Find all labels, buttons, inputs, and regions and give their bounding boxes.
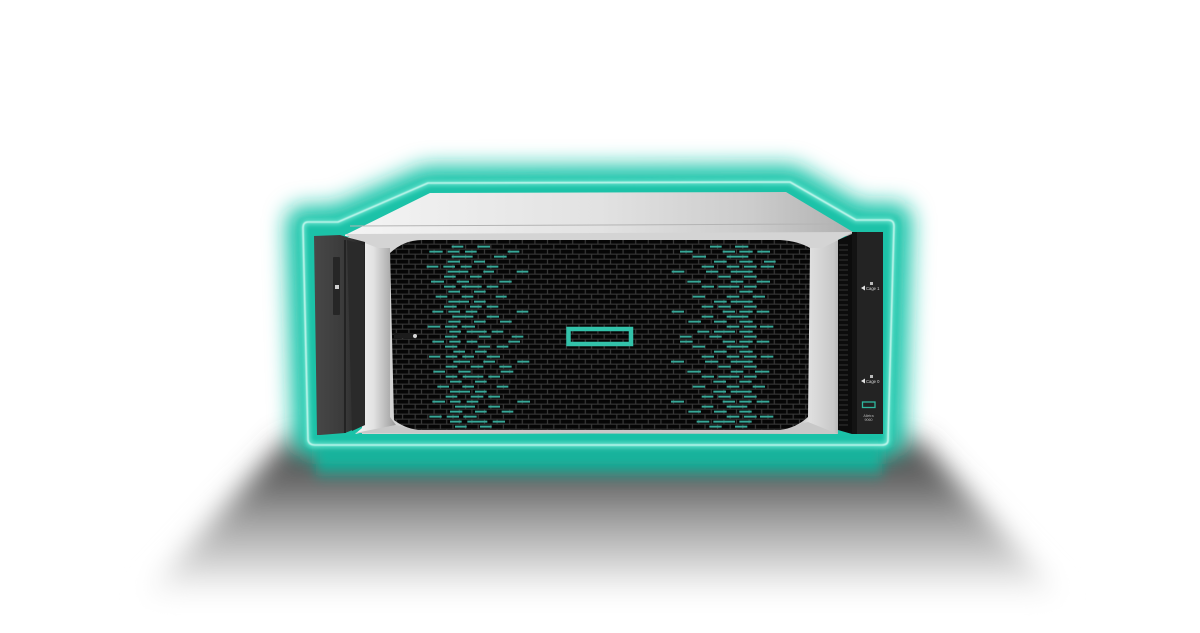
model label: 9060	[864, 418, 872, 422]
left ear handle	[333, 257, 340, 315]
silver front band	[345, 232, 853, 434]
left silver column	[346, 236, 396, 434]
teal logo rectangle	[568, 329, 631, 344]
right ear	[852, 232, 883, 434]
cage 0 label: Cage 0	[866, 379, 880, 384]
model label: Alletra	[863, 414, 874, 418]
left ear	[314, 235, 365, 435]
small teal logo	[862, 402, 875, 408]
teal band below outline	[316, 444, 882, 482]
cage 0 label	[861, 375, 880, 384]
right silver column	[790, 233, 853, 434]
bottom silver band	[355, 422, 838, 434]
floor shadow	[140, 440, 1065, 600]
front grille	[390, 240, 810, 430]
cage 1 label: Cage 1	[866, 286, 880, 291]
right vent	[838, 234, 852, 434]
model label	[863, 414, 874, 422]
teal glow around the server	[303, 182, 895, 482]
top plate	[345, 192, 853, 236]
glowing outline	[303, 182, 894, 445]
teal dashes: left cluster	[427, 247, 530, 427]
cage 1 label	[861, 282, 880, 291]
server chassis	[314, 192, 883, 435]
teal dashes: right cluster	[671, 247, 776, 427]
grille latch dot	[394, 333, 417, 338]
